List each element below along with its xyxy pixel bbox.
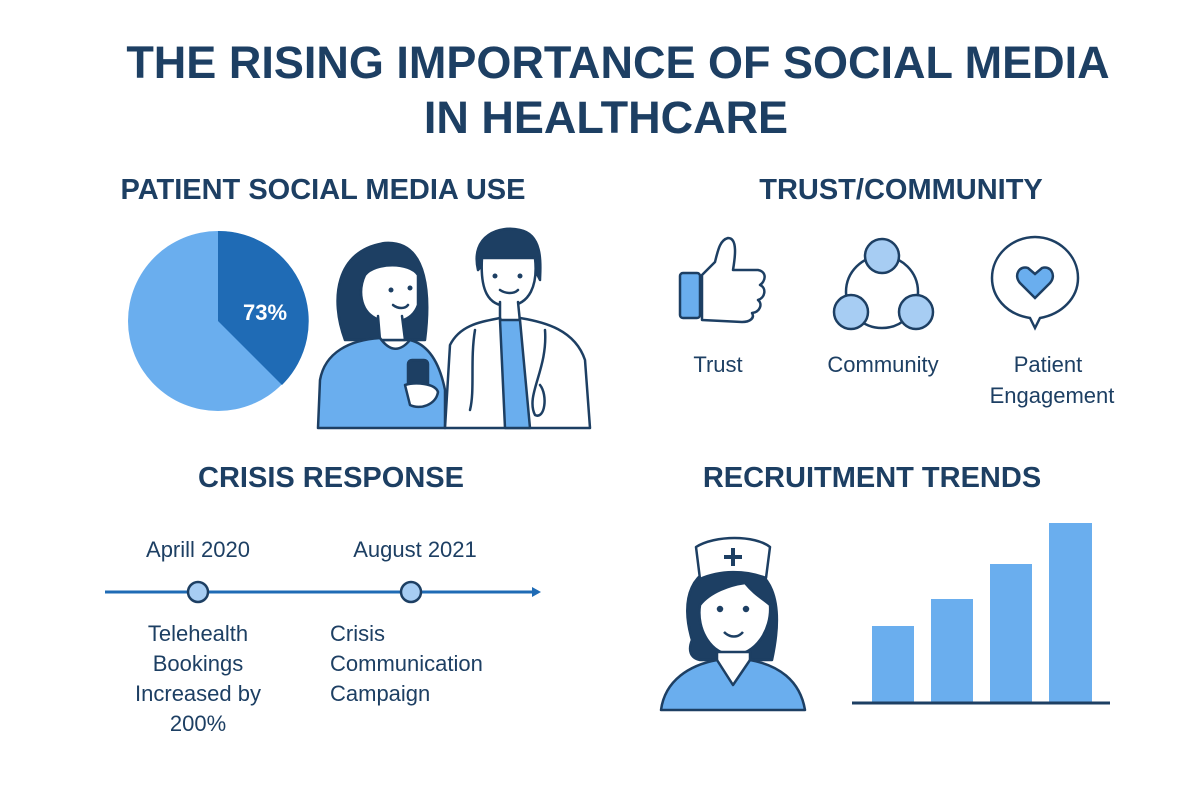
heading: recruitment trends: RECRUITMENT TRENDS bbox=[703, 462, 1041, 494]
timeline: August 2021 bbox=[353, 537, 477, 562]
timeline: 200% bbox=[170, 711, 226, 736]
timeline: Increased by bbox=[135, 681, 261, 706]
bar chart bbox=[852, 523, 1110, 703]
illustration: patient and doctor bbox=[318, 229, 590, 428]
heading: patient social media use: PATIENT SOCIAL MEDIA USE bbox=[121, 174, 525, 206]
timeline: Telehealth bbox=[148, 621, 248, 646]
label: patient engagement: Patient bbox=[1014, 352, 1082, 377]
label: patient engagement bbox=[990, 352, 1114, 408]
timeline: Crisis bbox=[330, 621, 385, 646]
title: IN HEALTHCARE bbox=[424, 92, 788, 143]
timeline: Campaign bbox=[330, 681, 430, 706]
title bbox=[126, 37, 1110, 143]
heading: trust/community: TRUST/COMMUNITY bbox=[759, 174, 1043, 206]
timeline: Communication bbox=[330, 651, 483, 676]
title: THE RISING IMPORTANCE OF SOCIAL MEDIA bbox=[126, 37, 1110, 88]
illustration: nurse bbox=[661, 538, 805, 710]
timeline bbox=[105, 537, 541, 736]
icon: heart speech bubble bbox=[992, 237, 1078, 328]
label: trust: Trust bbox=[693, 352, 743, 377]
icon: community bbox=[834, 239, 933, 329]
timeline: Aprill 2020 bbox=[146, 537, 250, 562]
pie chart: 73% bbox=[243, 300, 287, 325]
label: community: Community bbox=[827, 352, 939, 377]
timeline: Bookings bbox=[153, 651, 243, 676]
label: patient engagement: Engagement bbox=[990, 383, 1114, 408]
icon: thumbs up bbox=[680, 238, 765, 322]
heading: crisis response: CRISIS RESPONSE bbox=[198, 462, 464, 494]
pie chart bbox=[128, 231, 309, 411]
